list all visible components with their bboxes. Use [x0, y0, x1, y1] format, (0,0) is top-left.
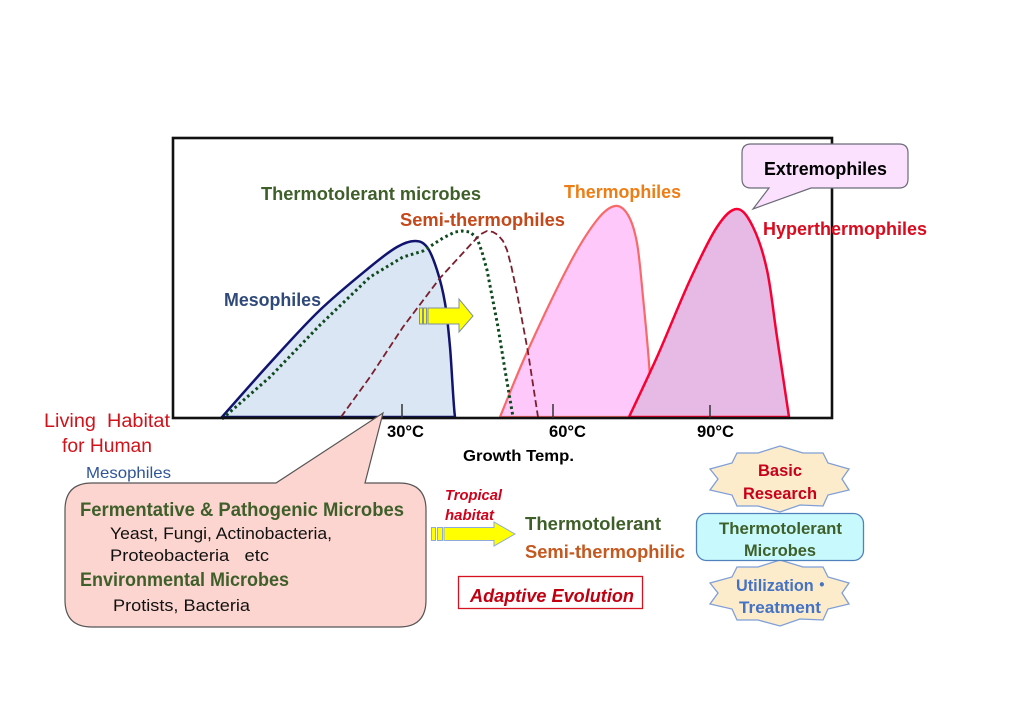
label: mesophiles small: Mesophiles: [86, 465, 171, 482]
callout: microbes in human habitat: Protists, Bacteria: [113, 597, 251, 615]
star: utilization and treatment: Treatment: [739, 598, 821, 617]
star: basic research: Research: [743, 484, 817, 503]
box: thermotolerant microbes: Thermotolerant: [719, 519, 842, 538]
callout: microbes in human habitat: [65, 413, 426, 627]
arrow: shift to higher temperature: [420, 299, 473, 332]
callout: microbes in human habitat: Proteobacteria etc: [110, 547, 269, 565]
axis ticks: [402, 404, 710, 418]
callout: microbes in human habitat: Yeast, Fungi, Actinobacteria,: [110, 525, 332, 543]
label: semi-thermophiles: Semi-thermophiles: [400, 209, 565, 230]
axis labels: temperatures: 60°C: [549, 423, 586, 441]
label: thermophiles: Thermophiles: [564, 181, 681, 202]
heading: living habitat for human: for Human: [62, 436, 152, 457]
curve: thermophiles: [500, 206, 652, 417]
axis labels: temperatures: 30°C: [387, 423, 424, 441]
curve: hyperthermophiles: [629, 209, 789, 417]
box: adaptive evolution: Adaptive Evolution: [469, 585, 634, 606]
heading: living habitat for human: [44, 411, 171, 457]
label: tropical habitat: habitat: [445, 508, 495, 524]
label: tropical habitat: [445, 488, 503, 524]
curve: mesophiles: [222, 241, 455, 417]
callout: extremophiles: Extremophiles: [764, 158, 887, 179]
axis labels: temperatures: [387, 423, 734, 441]
box: thermotolerant microbes: [696, 514, 864, 560]
star: basic research: [710, 446, 849, 512]
chart: growth temperature curves: [173, 138, 832, 419]
label: thermotolerant: Thermotolerant: [525, 513, 661, 534]
axis title: Growth Temp.: [463, 448, 574, 465]
chart frame: [173, 138, 832, 418]
label: semi-thermophilic: Semi-thermophilic: [525, 541, 685, 562]
star: basic research: Basic: [758, 461, 802, 480]
label: mesophiles: Mesophiles: [224, 289, 321, 310]
curve: semi-thermophiles: [341, 231, 538, 417]
label: thermotolerant microbes: Thermotolerant microbes: [261, 183, 481, 204]
label: tropical habitat: Tropical: [445, 488, 503, 504]
curve: thermotolerant microbes: [222, 231, 513, 419]
heading: living habitat for human: Living Habitat: [44, 411, 171, 432]
callout: microbes in human habitat: Environmental Microbes: [80, 570, 289, 591]
star: utilization and treatment: Utilization・: [736, 576, 830, 595]
arrow: tropical habitat: [432, 522, 515, 546]
axis labels: temperatures: 90°C: [697, 423, 734, 441]
box: adaptive evolution: [458, 576, 642, 608]
label: hyperthermophiles: Hyperthermophiles: [763, 218, 927, 239]
box: thermotolerant microbes: Microbes: [744, 541, 816, 560]
star: utilization and treatment: [710, 560, 849, 626]
callout: microbes in human habitat: Fermentative & Pathogenic Microbes: [80, 500, 404, 521]
callout: extremophiles: [742, 144, 908, 209]
